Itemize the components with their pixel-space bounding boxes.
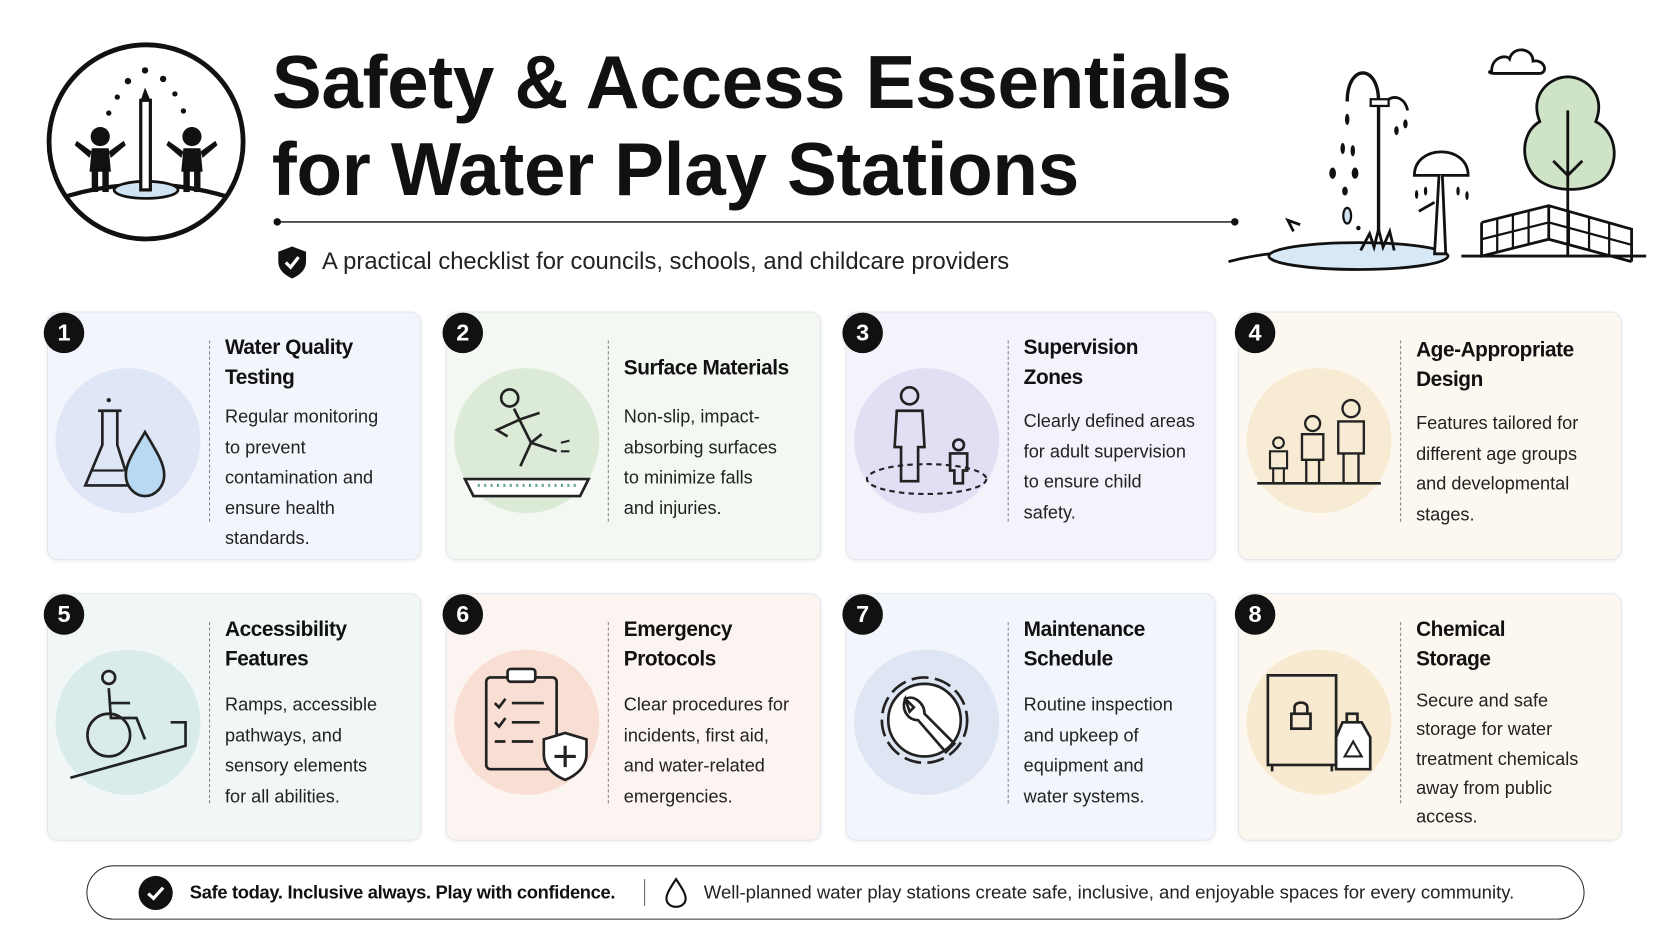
text: maintenance: Schedule (1024, 648, 1113, 671)
text: water quality (225, 336, 353, 389)
card 1: water quality testing: Regular monitoring (225, 406, 378, 427)
badge 5: 5 (57, 601, 71, 627)
badge 4: 4 (1249, 319, 1262, 346)
icon: locked cabinet and bottle (1247, 650, 1392, 795)
card 5: accessibility: pathways, and (225, 725, 342, 745)
icon: adult and child (854, 368, 999, 513)
card 7: maintenance schedule: Routine inspection (1024, 695, 1173, 715)
text: accessibility (225, 618, 347, 671)
badge 8: 8 (1249, 601, 1262, 627)
card 3: supervision zones: for adult supervision (1024, 441, 1186, 461)
badge 4 (1235, 313, 1275, 353)
card 2: surface materials: to minimize falls (624, 467, 753, 488)
text: accessibility: Accessibility (225, 618, 347, 641)
icon: family of three (1247, 368, 1392, 513)
card 1: water quality testing: ensure health (225, 498, 335, 518)
card 5: accessibility: sensory elements (225, 755, 367, 776)
card 5: accessibility (47, 593, 421, 841)
card 3: supervision zones: Clearly defined areas (1024, 411, 1195, 431)
card 6: emergency protocols (446, 593, 821, 841)
card 6: emergency protocols: and water-related (624, 755, 765, 776)
text: water quality: Testing (225, 366, 294, 389)
card 5: accessibility: Ramps, accessible (225, 695, 377, 715)
card 1: water quality testing: to prevent (225, 437, 306, 457)
footer banner: Well-planned water play stations create safe, inclusive, and enjoyable spaces for every community. (704, 881, 1514, 903)
card 8: chemical storage: Secure and safe (1416, 690, 1548, 711)
text: age: Age-Appropriate (1416, 338, 1574, 362)
header illustration: water play scene (1228, 48, 1646, 271)
text: chemical (1416, 618, 1505, 671)
card 7: maintenance schedule: equipment and (1024, 755, 1144, 776)
badge 5 (44, 594, 84, 635)
card 6: emergency protocols: Clear procedures for (624, 695, 789, 715)
icon: water drop outline (665, 877, 687, 908)
card 2: surface materials: Non-slip, impact- (624, 406, 760, 427)
icon: check circle (138, 876, 173, 910)
footer banner (86, 865, 1585, 920)
text: accessibility: Features (225, 648, 308, 671)
card 2: surface materials: absorbing surfaces (624, 437, 777, 457)
text: supervision: Supervision (1024, 336, 1138, 360)
text: maintenance (1024, 618, 1145, 671)
badge 8 (1235, 594, 1275, 635)
card 8: chemical storage: treatment chemicals (1416, 749, 1578, 769)
badge 3 (842, 313, 883, 353)
title: Safety & Access Essentials (272, 41, 1232, 124)
icon: wheelchair ramp (55, 650, 200, 795)
logo: fountain with kids (46, 42, 246, 242)
badge 6: 6 (456, 601, 469, 627)
card 4: age-appropriate design: Features tailored for (1416, 413, 1578, 433)
title (272, 41, 1232, 211)
card 2: surface materials (446, 312, 821, 560)
card 8: chemical storage: access. (1416, 807, 1478, 827)
badge 3: 3 (856, 319, 869, 346)
card 6: emergency protocols: incidents, first aid, (624, 725, 769, 745)
card 3: supervision zones: to ensure child (1024, 472, 1142, 492)
icon: shield check (278, 246, 306, 278)
text: emergency: Protocols (624, 648, 716, 671)
title: for Water Play Stations (272, 128, 1079, 211)
icon: gear with wrench (854, 650, 999, 795)
card 8: chemical storage: storage for water (1416, 719, 1552, 740)
text: age: Design (1416, 368, 1483, 392)
text: supervision (1024, 336, 1138, 389)
card 1: water quality testing: contamination and (225, 467, 373, 488)
text: age (1416, 338, 1574, 392)
icon: clipboard with shield (454, 650, 599, 795)
badge 2: 2 (456, 319, 469, 346)
card 7: maintenance schedule: and upkeep of (1024, 725, 1139, 745)
card 7: maintenance schedule (846, 593, 1216, 841)
card 4: age-appropriate design: and developmental (1416, 474, 1569, 494)
text: surface materials: Surface Materials (624, 356, 789, 380)
card 7: maintenance schedule: water systems. (1024, 786, 1145, 806)
badge 7: 7 (856, 601, 869, 627)
badge 1: 1 (57, 319, 71, 346)
text: water quality: Water Quality (225, 336, 353, 360)
title underline (274, 218, 1239, 226)
card 8: chemical storage: away from public (1416, 778, 1552, 798)
text: emergency (624, 618, 732, 671)
badge 7 (842, 594, 883, 635)
card 8: chemical storage (1238, 593, 1622, 841)
badge 6 (443, 594, 483, 635)
badge 1 (44, 313, 84, 353)
text: emergency: Emergency (624, 618, 732, 641)
card 4: age-appropriate design (1238, 312, 1622, 560)
text: supervision: Zones (1024, 366, 1083, 389)
icon: slipping person (454, 368, 599, 513)
card 1: water quality testing: standards. (225, 528, 310, 548)
card 5: accessibility: for all abilities. (225, 786, 340, 806)
text: maintenance: Maintenance (1024, 618, 1145, 641)
badge 2 (443, 313, 483, 353)
card 6: emergency protocols: emergencies. (624, 786, 733, 806)
card 4: age-appropriate design: stages. (1416, 504, 1475, 524)
footer banner: Safe today. Inclusive always. Play with confidence. (190, 881, 615, 903)
card 3: supervision zones (846, 312, 1216, 560)
text: chemical: Storage (1416, 648, 1491, 671)
card 3: supervision zones: safety. (1024, 502, 1076, 522)
subtitle: A practical checklist for councils, schools, and childcare providers (322, 248, 1009, 274)
card 1: water quality testing (47, 312, 421, 560)
card 4: age-appropriate design: different age groups (1416, 443, 1577, 464)
card 2: surface materials: and injuries. (624, 498, 722, 518)
icon: flask and drop (55, 368, 200, 513)
text: chemical: Chemical (1416, 618, 1505, 641)
